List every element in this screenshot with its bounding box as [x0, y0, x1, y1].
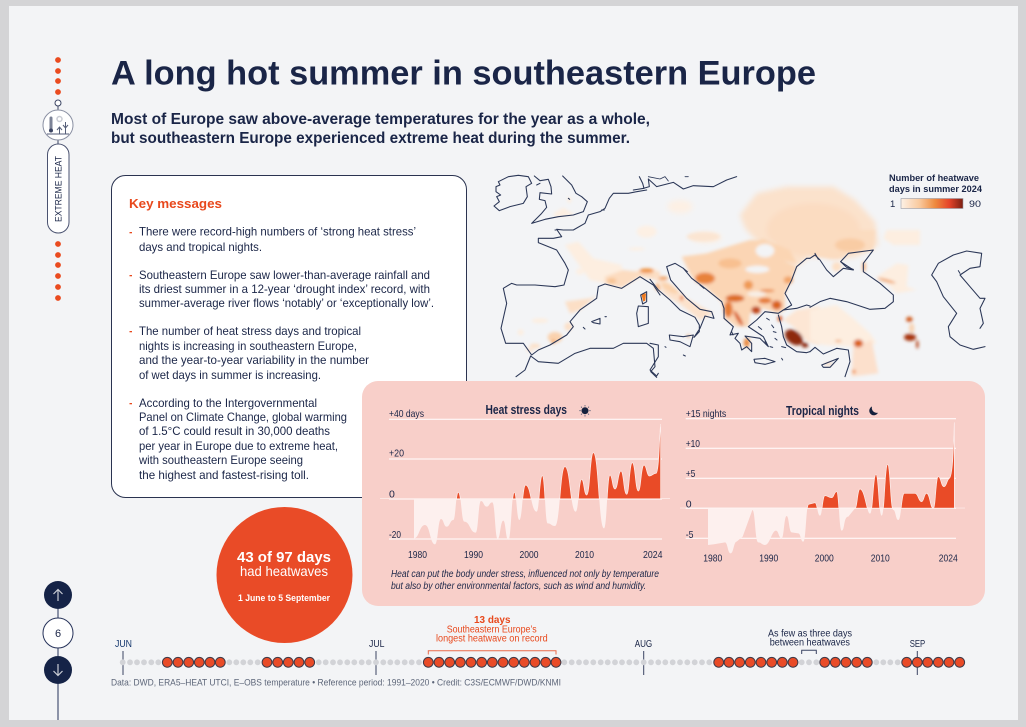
heat field: western Europe [518, 197, 662, 352]
red dots: heatwave days [162, 657, 965, 667]
chart: heat stress days: +40 days [389, 408, 424, 420]
annotation: longest heatwave: 13 days [474, 615, 511, 626]
title: A long hot summer in southeastern Europe [111, 54, 816, 92]
chart: heat stress days: 2010 [575, 549, 594, 561]
chart: tropical nights: +15 nights [686, 408, 726, 420]
month labels: AUG [635, 639, 652, 650]
bullet: increasing trends: of wet days in summer is increasing. [139, 369, 321, 382]
bullet: IPCC deaths: the highest and fastest-rising toll. [139, 469, 309, 482]
coastlines: Black Sea, Turkey and Caspian [810, 250, 985, 377]
annotation: longest heatwave: longest heatwave on record [436, 634, 548, 645]
chart: tropical nights: 2010 [871, 552, 890, 564]
callout circle: 43 of 97 days: had heatwaves [240, 563, 328, 579]
bullet: increasing trends: The number of heat stress days and tropical [139, 325, 361, 338]
area: heat stress above average [380, 424, 670, 499]
chart: heat stress days: 1990 [464, 549, 483, 561]
chart title: heat stress days: Heat stress days [486, 403, 567, 417]
map legend: 1 [890, 199, 895, 210]
month ticks [123, 651, 917, 675]
chart: tropical nights [680, 404, 965, 564]
callout circle: 43 of 97 days [216, 507, 352, 643]
coastlines: western Europe [494, 175, 660, 377]
bullet: rainfall and drought: Southeastern Europe saw lower-than-average rainfall and [139, 269, 430, 282]
chart: tropical nights: 1990 [759, 552, 778, 564]
heat field: Turkey, Caucasus and Middle East [810, 230, 920, 377]
chart caption: Heat can put the body under stress, influenced not only by temperature [391, 569, 659, 580]
map legend: days in summer 2024 [889, 184, 983, 195]
bullet: record highs: There were record-high numbers of ‘strong heat stress’ [139, 226, 416, 239]
area: tropical nights above average [680, 422, 965, 508]
annotation: three days between heatwaves [768, 629, 852, 654]
area: heat stress below average [414, 499, 607, 544]
annotation: three days between heatwaves: As few as three days [768, 629, 852, 640]
chart caption [391, 569, 659, 592]
key messages heading: Key messages [129, 196, 222, 211]
bullet: IPCC deaths: per year in Europe due to extreme heat, [139, 440, 338, 453]
panel: key messages [112, 176, 466, 498]
month labels: JUN [115, 639, 132, 650]
bullet: IPCC deaths: Panel on Climate Change, global warming [139, 411, 347, 424]
coastlines: Italy and the Balkans [650, 258, 810, 376]
chart: tropical nights: 1980 [703, 552, 722, 564]
side navigation: section marker: EXTREME HEAT [54, 156, 64, 222]
chart title: tropical nights: Tropical nights [786, 404, 859, 418]
icon: sun [579, 405, 591, 416]
chart: tropical nights: +10 [686, 438, 700, 450]
map legend: 90 [969, 199, 981, 210]
subtitle: Most of Europe saw above-average temperatures for the year as a whole, [111, 111, 650, 128]
bullet: IPCC deaths: According to the Intergovernmental [139, 397, 317, 410]
map legend [889, 173, 983, 210]
map legend: Number of heatwave [889, 173, 979, 184]
bullet: rainfall and drought [130, 269, 434, 310]
side navigation: page controls: 6 [55, 628, 61, 640]
chart: heat stress days: 2000 [520, 549, 539, 561]
month labels: SEP [910, 639, 925, 650]
chart: heat stress days: 2024 [643, 549, 663, 561]
bullet: increasing trends: and the year-to-year variability in the number [139, 354, 369, 367]
bullet: rainfall and drought: summer-average river flows ‘notably’ or ‘exceptionally low’. [139, 297, 434, 310]
chart caption: but also by other environmental factors, such as wind and humidity. [391, 581, 646, 592]
chart: heat stress days: +20 [389, 448, 404, 460]
month labels [115, 639, 925, 650]
bullet: increasing trends: nights is increasing in southeastern Europe, [139, 340, 357, 353]
chart: heat stress days: 1980 [408, 549, 427, 561]
grey dots: days without heatwave [120, 659, 901, 665]
heat field: eastern Europe north of the crops [667, 187, 878, 267]
chart: tropical nights: 2000 [815, 552, 834, 564]
icon: moon [869, 406, 878, 415]
bullet: IPCC deaths: of 1.5°C could result in 30,000 deaths [139, 425, 330, 438]
timeline: heatwave days 1 June to 5 September [115, 615, 965, 675]
side navigation: page controls [43, 581, 73, 720]
chart: heat stress days: -20 [389, 529, 401, 541]
chart: tropical nights: -5 [686, 529, 694, 541]
side navigation: section marker [43, 57, 73, 301]
bullet: IPCC deaths [130, 397, 347, 482]
chart: tropical nights: +5 [686, 468, 696, 480]
annotation: longest heatwave: Southeastern Europe’s [447, 625, 537, 636]
bullet: record highs: days and tropical nights. [139, 241, 262, 254]
heat field: Italy and the Balkans [653, 232, 820, 349]
callout circle: 43 of 97 days: 43 of 97 days [237, 550, 331, 566]
annotation: three days between heatwaves: between heatwaves [770, 638, 850, 649]
month labels: JUL [369, 639, 385, 650]
subtitle: but southeastern Europe experienced extreme heat during the summer. [111, 130, 630, 147]
callout circle: 43 of 97 days: 1 June to 5 September [238, 593, 330, 604]
bullet: rainfall and drought: its driest summer in a 12-year ‘drought index’ record, with [139, 283, 430, 296]
map: heatwave days in summer 2024 [494, 175, 985, 377]
chart: heat stress days [380, 403, 670, 592]
coastlines: North Sea and Baltic [633, 177, 737, 190]
bullet: increasing trends [130, 325, 369, 382]
chart: tropical nights: 0 [686, 498, 692, 510]
area: tropical nights below average [708, 508, 901, 554]
chart: heat stress days: 0 [389, 488, 395, 500]
bullet: IPCC deaths: with southeastern Europe seeing [138, 454, 303, 467]
panel: charts [362, 381, 985, 606]
data source note: Data: DWD, ERA5–HEAT UTCI, E–OBS temperature • Reference period: 1991–2020 • Credit: C3S/ECMWF/DWD/KNMI [111, 677, 561, 687]
annotation: longest heatwave [428, 615, 556, 654]
subtitle [111, 111, 650, 147]
chart: tropical nights: 2024 [939, 552, 958, 564]
bullet: record highs [130, 226, 416, 254]
